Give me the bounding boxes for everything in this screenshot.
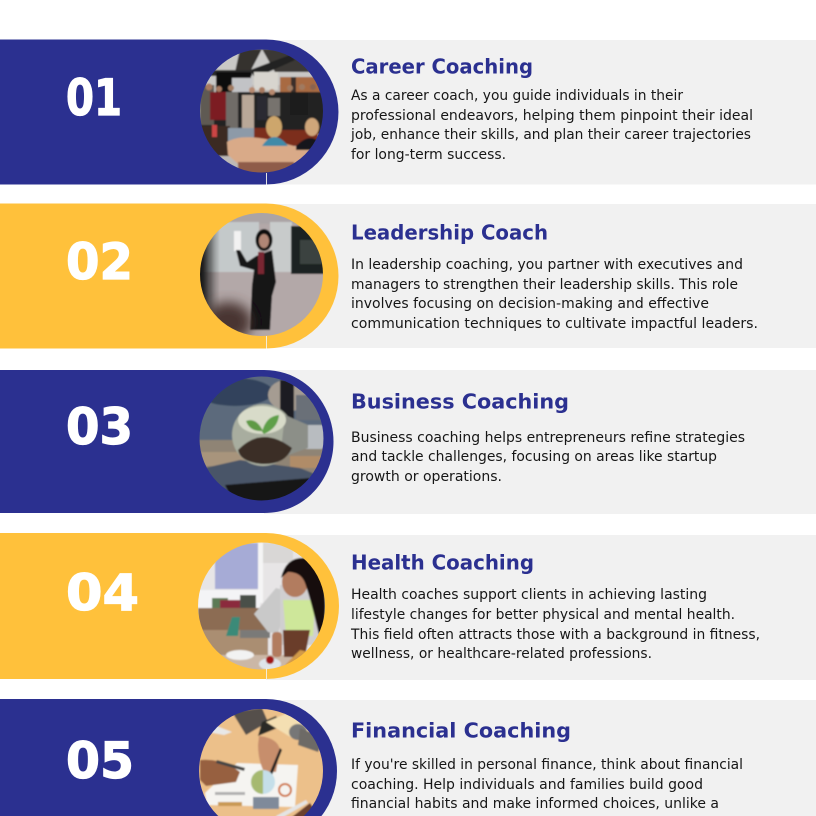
description: financial habits and make informed choices, unlike a bbox=[351, 796, 719, 812]
photo: woman preparing food bbox=[198, 542, 325, 670]
description bbox=[350, 587, 760, 662]
description: growth or operations. bbox=[351, 469, 502, 485]
panel: financial coaching bbox=[0, 699, 816, 816]
description: job, enhance their skills, and plan their career trajectories bbox=[350, 127, 751, 143]
photo: seedling in a light bulb bbox=[200, 376, 324, 500]
panel: health coaching bbox=[0, 533, 816, 680]
description: In leadership coaching, you partner with executives and bbox=[351, 257, 743, 273]
description: coaching. Help individuals and families build good bbox=[351, 777, 703, 793]
number tab bbox=[0, 204, 338, 348]
description: If you're skilled in personal finance, think about financial bbox=[351, 757, 743, 773]
description bbox=[350, 88, 753, 163]
number tab bbox=[0, 533, 339, 679]
number 03: 03 bbox=[66, 398, 133, 456]
number 04: 04 bbox=[66, 564, 139, 622]
background band bbox=[266, 204, 816, 348]
description: lifestyle changes for better physical and mental health. bbox=[351, 607, 735, 623]
description: This field often attracts those with a background in fitness, bbox=[350, 627, 760, 643]
description: for long-term success. bbox=[351, 147, 506, 163]
description: wellness, or healthcare-related professions. bbox=[351, 646, 652, 662]
panel: leadership coach bbox=[0, 204, 816, 348]
description bbox=[351, 430, 745, 485]
description: and tackle challenges, focusing on areas like startup bbox=[351, 449, 717, 465]
description: As a career coach, you guide individuals in their bbox=[351, 88, 683, 104]
heading: Career Coaching bbox=[351, 54, 533, 78]
heading: Business Coaching bbox=[351, 390, 569, 414]
number 02: 02 bbox=[66, 233, 133, 291]
description: Business coaching helps entrepreneurs refine strategies bbox=[351, 430, 745, 446]
photo: hands reviewing financial charts bbox=[199, 709, 323, 816]
heading: Health Coaching bbox=[351, 550, 534, 574]
divider tick bbox=[266, 668, 267, 679]
panel: career coaching bbox=[0, 40, 816, 184]
heading: Leadership Coach bbox=[351, 220, 548, 244]
photo: woman presenting at a whiteboard bbox=[200, 213, 323, 336]
number tab bbox=[0, 370, 334, 513]
description bbox=[351, 257, 758, 332]
divider tick bbox=[266, 336, 267, 348]
photo: group in a loft bbox=[200, 50, 323, 172]
panel: business coaching bbox=[0, 370, 816, 514]
heading: Financial Coaching bbox=[351, 718, 571, 742]
description: involves focusing on decision-making and effective bbox=[351, 296, 709, 312]
background band bbox=[264, 370, 816, 514]
number tab bbox=[0, 40, 338, 184]
description: communication techniques to cultivate impactful leaders. bbox=[351, 316, 758, 332]
background band bbox=[266, 535, 816, 680]
background band bbox=[266, 40, 816, 184]
number 01: 01 bbox=[66, 69, 122, 127]
description: professional endeavors, helping them pinpoint their ideal bbox=[351, 108, 753, 124]
background band bbox=[266, 700, 816, 816]
divider tick bbox=[266, 173, 267, 184]
description: managers to strengthen their leadership skills. This role bbox=[351, 277, 738, 293]
number 05: 05 bbox=[66, 732, 134, 790]
description: Health coaches support clients in achieving lasting bbox=[351, 587, 707, 603]
number tab bbox=[0, 699, 337, 816]
description bbox=[351, 757, 743, 812]
